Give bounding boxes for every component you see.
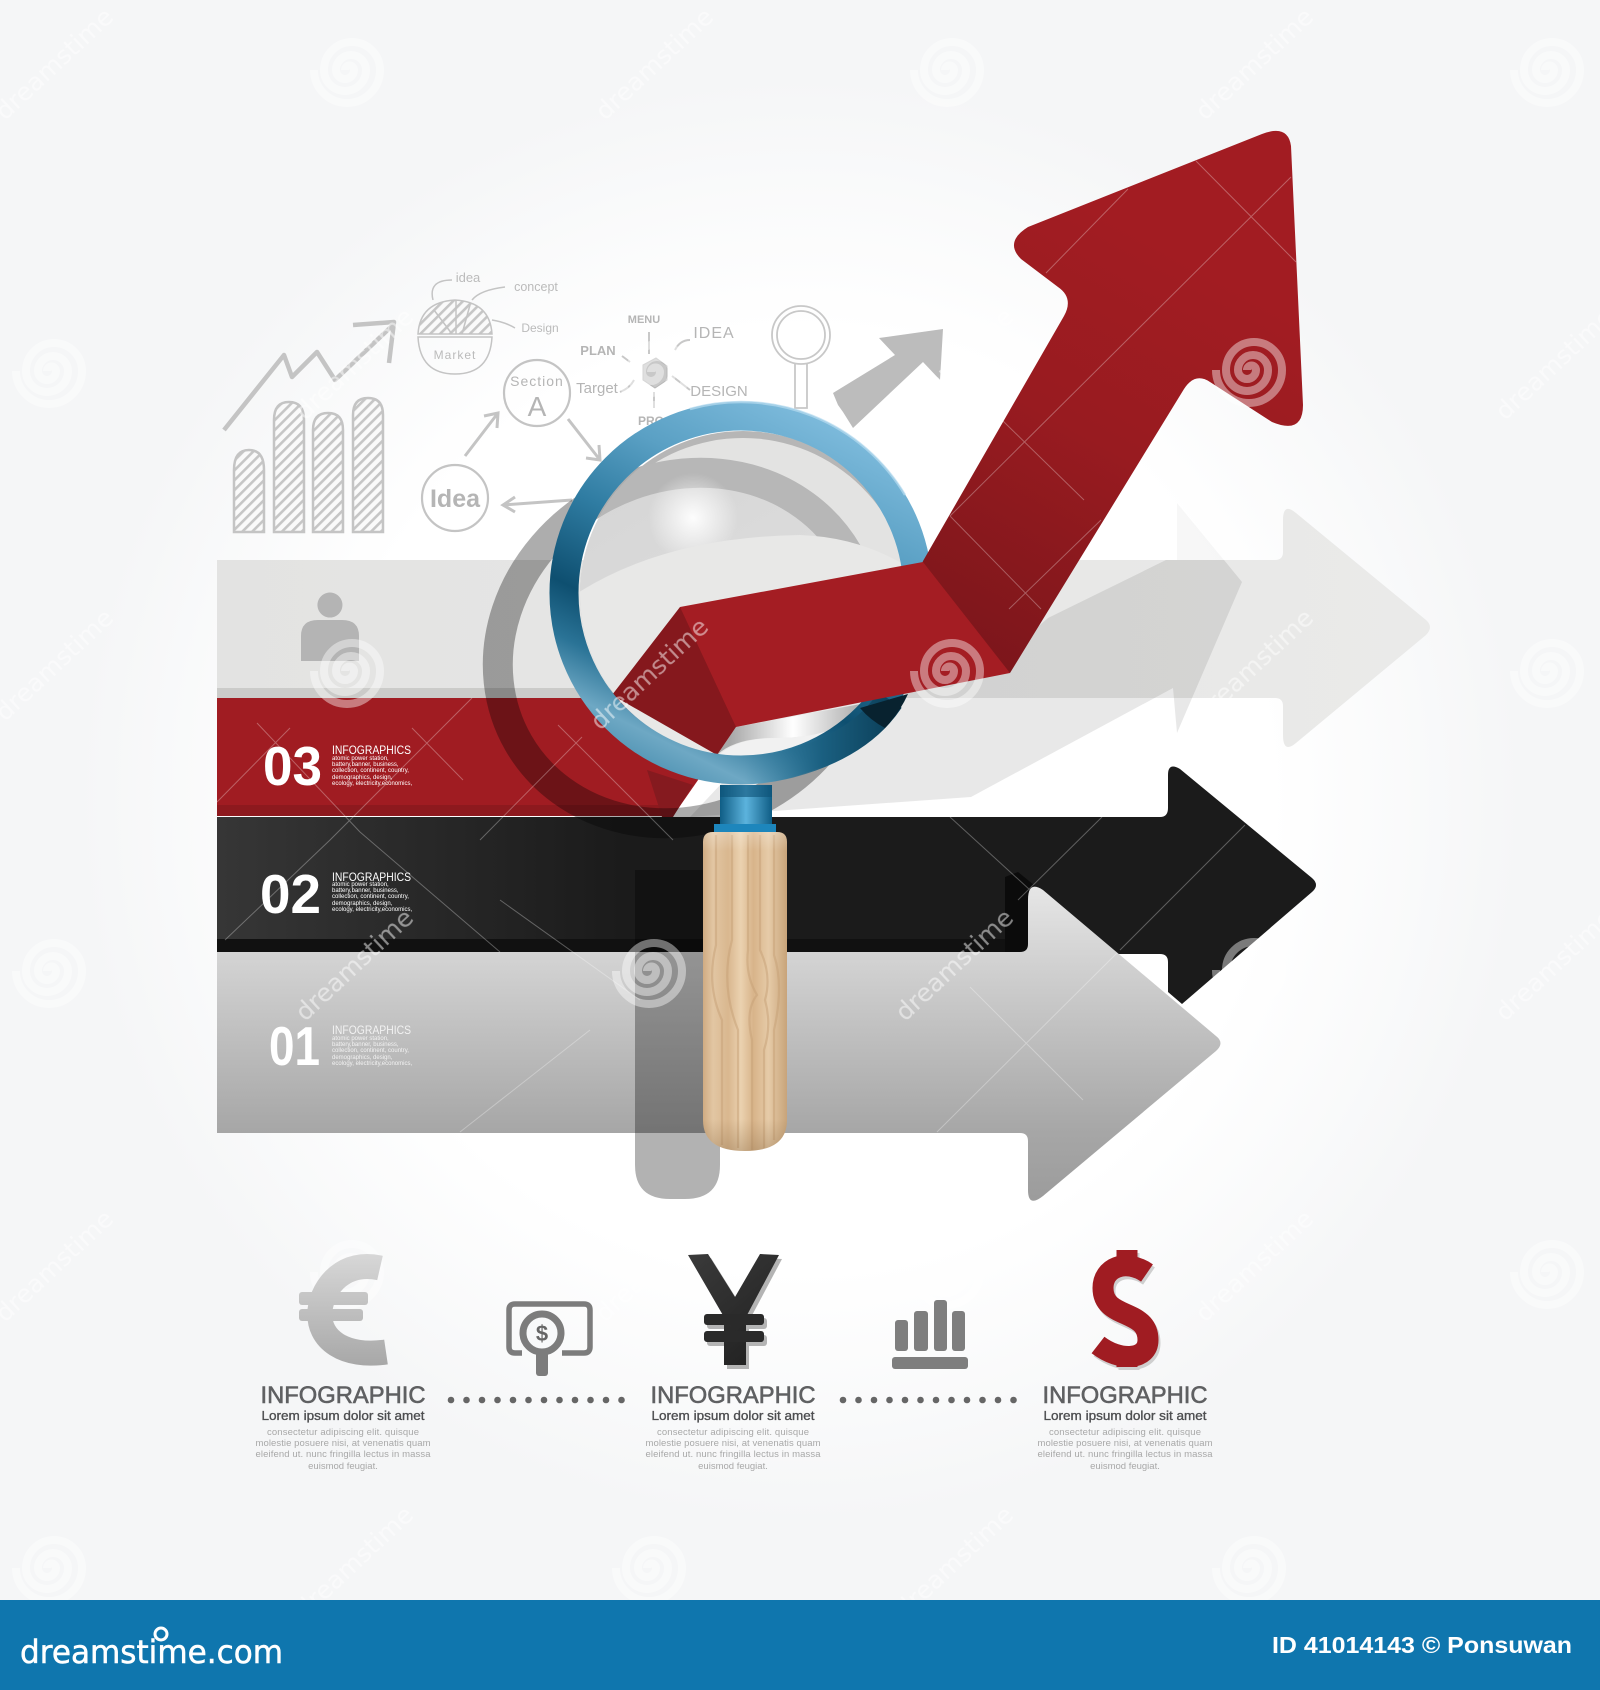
label 02: ecology, electricity,economics, bbox=[332, 907, 412, 913]
text block: dollar column: molestie posuere nisi, at venenatis quam bbox=[1038, 1438, 1213, 1449]
sketch: cube diagram: PLAN bbox=[580, 343, 616, 358]
sketch: bar chart with rising line bbox=[224, 322, 394, 532]
magnifier bbox=[433, 402, 933, 1151]
sketch: section A and idea cycle: Idea bbox=[430, 485, 481, 513]
shadow of rising arrow bbox=[690, 503, 1242, 817]
label 02: atomic power station, bbox=[332, 882, 389, 888]
watermark wordmarks: dreamstime bbox=[589, 2, 719, 126]
label 03: collection, continent, country, bbox=[332, 768, 409, 774]
watermark wordmarks: dreamstime bbox=[1189, 1204, 1319, 1328]
text block: euro column: INFOGRAPHIC bbox=[260, 1382, 426, 1409]
label 03: demographics, design, bbox=[332, 775, 393, 781]
handle shadow bbox=[635, 870, 720, 1199]
footer image id: ID 41014143 © Ponsuwan bbox=[1272, 1632, 1572, 1658]
band 03: red bbox=[217, 698, 705, 817]
sketch: market pie: idea bbox=[456, 270, 481, 285]
text block: yen column: euismod feugiat. bbox=[698, 1461, 768, 1472]
dotted connector left bbox=[448, 1397, 625, 1403]
sketch: market pie: Design bbox=[521, 321, 559, 335]
text block: euro column: consectetur adipiscing elit. quisque bbox=[267, 1427, 419, 1438]
watermark wordmarks: dreamstime bbox=[889, 302, 1019, 426]
footer bar bbox=[0, 1600, 1600, 1690]
magnifier glass bbox=[580, 431, 900, 756]
sketch: market pie: concept bbox=[514, 280, 558, 294]
label 02: 02 bbox=[260, 863, 321, 925]
text block: yen column: consectetur adipiscing elit. quisque bbox=[657, 1427, 809, 1438]
magnifier wooden handle bbox=[703, 832, 787, 1151]
label 03: INFOGRAPHICS bbox=[332, 743, 411, 757]
label 03: atomic power station, bbox=[332, 756, 389, 762]
sketch: small magnifier bbox=[772, 306, 830, 408]
label 02: INFOGRAPHICS bbox=[332, 870, 411, 884]
arrow 01: grey bbox=[217, 887, 1220, 1201]
strip under grey band bbox=[217, 688, 697, 698]
label 02: collection, continent, country, bbox=[332, 894, 409, 900]
label 01: 01 bbox=[269, 1015, 320, 1077]
sketch: cube diagram: Target bbox=[576, 380, 619, 397]
text block: yen column: eleifend ut. nunc fringilla lectus in massa bbox=[646, 1449, 821, 1460]
label 02 bbox=[260, 863, 412, 925]
text block: dollar column: consectetur adipiscing elit. quisque bbox=[1049, 1427, 1201, 1438]
arrow fold: dark side face bbox=[612, 607, 750, 755]
text block: yen column: molestie posuere nisi, at venenatis quam bbox=[646, 1438, 821, 1449]
watermark wordmarks: dreamstime bbox=[1189, 2, 1319, 126]
icon: yen bbox=[688, 1254, 782, 1369]
label 01: battery,banner, business, bbox=[332, 1042, 399, 1048]
text block: dollar column: Lorem ipsum dolor sit amet bbox=[1044, 1408, 1207, 1423]
watermark wordmarks: dreamstime bbox=[289, 1500, 419, 1624]
watermark wordmarks: dreamstime bbox=[589, 1204, 719, 1328]
text block: dollar column: eleifend ut. nunc fringilla lectus in massa bbox=[1038, 1449, 1213, 1460]
watermark wordmarks: dreamstime bbox=[289, 302, 419, 426]
magnifier neck bbox=[714, 785, 776, 833]
sketch: market pie: Market bbox=[434, 348, 476, 362]
icon: magnifier over banknote bbox=[509, 1304, 590, 1376]
icon: bar chart bbox=[892, 1300, 968, 1369]
label 03: ecology, electricity,economics, bbox=[332, 781, 412, 787]
sketch: cube diagram bbox=[576, 314, 748, 428]
text block: yen column: INFOGRAPHIC bbox=[650, 1382, 816, 1409]
text block: yen column: Lorem ipsum dolor sit amet bbox=[652, 1408, 815, 1423]
watermark wordmarks: dreamstime bbox=[889, 1500, 1019, 1624]
label 03 bbox=[263, 735, 412, 797]
ghost arrow: light grey band bbox=[217, 509, 1430, 747]
text block: dollar column bbox=[1038, 1382, 1213, 1472]
arrow front panel bbox=[680, 562, 1010, 727]
label 01 bbox=[269, 1015, 412, 1077]
text block: dollar column: INFOGRAPHIC bbox=[1042, 1382, 1208, 1409]
label 03: battery,banner, business, bbox=[332, 762, 399, 768]
text block: euro column bbox=[256, 1382, 431, 1472]
text block: euro column: eleifend ut. nunc fringilla lectus in massa bbox=[256, 1449, 431, 1460]
sketch: market pie bbox=[418, 270, 559, 374]
rising red arrow bbox=[680, 131, 1303, 727]
sketch: cube diagram: PRO bbox=[638, 414, 664, 428]
sketch: section A and idea cycle bbox=[422, 360, 600, 531]
label 02: demographics, design, bbox=[332, 901, 393, 907]
text block: euro column: euismod feugiat. bbox=[308, 1461, 378, 1472]
label 03: 03 bbox=[263, 735, 322, 797]
label 02: battery,banner, business, bbox=[332, 888, 399, 894]
text block: dollar column: euismod feugiat. bbox=[1090, 1461, 1160, 1472]
text block: yen column bbox=[646, 1382, 821, 1472]
icon: dollar bbox=[1098, 1250, 1150, 1370]
arrow 02: black bbox=[217, 767, 1316, 1004]
watermark wordmarks: dreamstime bbox=[1189, 603, 1319, 727]
watermark wordmarks: dreamstime bbox=[584, 612, 714, 736]
footer logo: dreamstime.com bbox=[20, 1633, 283, 1671]
watermark wordmarks: dreamstime bbox=[889, 903, 1019, 1027]
label 01: INFOGRAPHICS bbox=[332, 1023, 411, 1037]
dotted connector right bbox=[840, 1397, 1017, 1403]
lens ring shadow bbox=[433, 406, 933, 890]
icon: person bbox=[301, 592, 359, 661]
sketch: section A and idea cycle: Section bbox=[510, 373, 564, 389]
icon: euro bbox=[299, 1266, 386, 1353]
label 01: collection, continent, country, bbox=[332, 1048, 409, 1054]
watermark wordmarks: dreamstime bbox=[289, 903, 419, 1027]
sketch: cube diagram: MENU bbox=[628, 314, 660, 326]
sketch: cube diagram: DESIGN bbox=[690, 383, 748, 400]
label 01: atomic power station, bbox=[332, 1036, 389, 1042]
label 01: demographics, design, bbox=[332, 1055, 393, 1061]
text block: euro column: Lorem ipsum dolor sit amet bbox=[262, 1408, 425, 1423]
sketch: section A and idea cycle: A bbox=[528, 391, 547, 422]
text block: euro column: molestie posuere nisi, at venenatis quam bbox=[256, 1438, 431, 1449]
sketch: brush arrow bbox=[833, 329, 943, 428]
icon: magnifier over banknote: $ bbox=[536, 1321, 548, 1346]
sketch: cube diagram: IDEA bbox=[693, 325, 735, 342]
label 01: ecology, electricity,economics, bbox=[332, 1061, 412, 1067]
watermark thin lines bbox=[217, 161, 1296, 1132]
magnifier blue ring bbox=[564, 416, 918, 770]
